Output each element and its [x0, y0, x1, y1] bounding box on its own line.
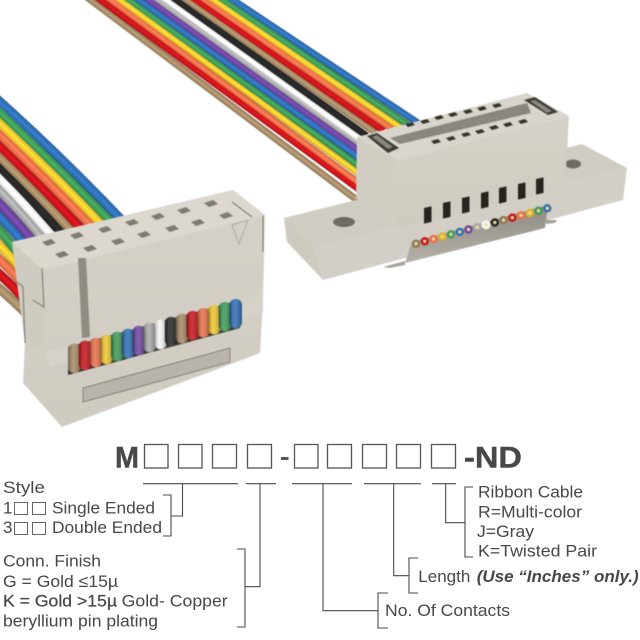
right ribbon cable	[80, 0, 418, 203]
body edge lines	[17, 202, 263, 343]
ribbon cable legend	[477, 483, 597, 561]
connector finish legend	[3, 552, 228, 631]
ribbon cable legend: Ribbon Cable	[478, 483, 583, 502]
socket holes	[42, 200, 233, 258]
front latch windows	[424, 177, 544, 224]
connector finish bracket	[237, 484, 260, 627]
style legend: 1	[3, 498, 12, 517]
coloured wire rings	[68, 299, 242, 373]
connector body	[12, 190, 265, 427]
wire exit strip	[383, 205, 557, 268]
key marker triangle	[232, 220, 248, 244]
ribbon cable legend: R=Multi-color	[478, 503, 582, 522]
left connector	[12, 190, 265, 427]
length bracket	[394, 484, 418, 593]
connector finish legend: K = Gold >15µ	[3, 592, 117, 611]
left ribbon cable	[0, 93, 128, 313]
housing top slot and pockets	[367, 97, 558, 153]
part number heading: -ND	[464, 442, 522, 474]
lower recessed window	[83, 348, 230, 402]
contact holes	[405, 103, 528, 144]
connector finish legend: Conn. Finish	[3, 552, 101, 571]
number of contacts bracket	[323, 484, 388, 628]
length label: (Use “Inches” only.)	[477, 567, 639, 586]
ribbon cable legend: K=Twisted Pair	[478, 542, 597, 561]
style connector bracket	[163, 484, 182, 536]
ribbon cable legend: J=Gray	[477, 522, 535, 541]
part number heading	[115, 442, 522, 474]
wire slot	[68, 300, 240, 375]
wire ends	[412, 204, 552, 248]
style legend: Style	[3, 478, 45, 497]
vertical groove	[78, 258, 90, 338]
connector finish legend: G = Gold ≤15µ	[3, 572, 118, 591]
length label: Length	[418, 567, 470, 586]
mounting flange	[284, 144, 627, 280]
style legend	[3, 478, 162, 537]
ribbon cable bracket	[446, 484, 473, 557]
part number heading: M	[115, 442, 139, 474]
style legend: Single Ended	[52, 498, 155, 517]
style legend: 3	[3, 518, 12, 537]
part number underlines	[143, 483, 456, 485]
connector finish legend: Gold- Copper	[122, 592, 228, 611]
number of contacts label: No. Of Contacts	[385, 601, 510, 620]
style legend: Double Ended	[52, 518, 162, 537]
housing body	[356, 93, 569, 228]
right connector	[284, 93, 627, 280]
connector finish legend: beryllium pin plating	[3, 612, 158, 631]
